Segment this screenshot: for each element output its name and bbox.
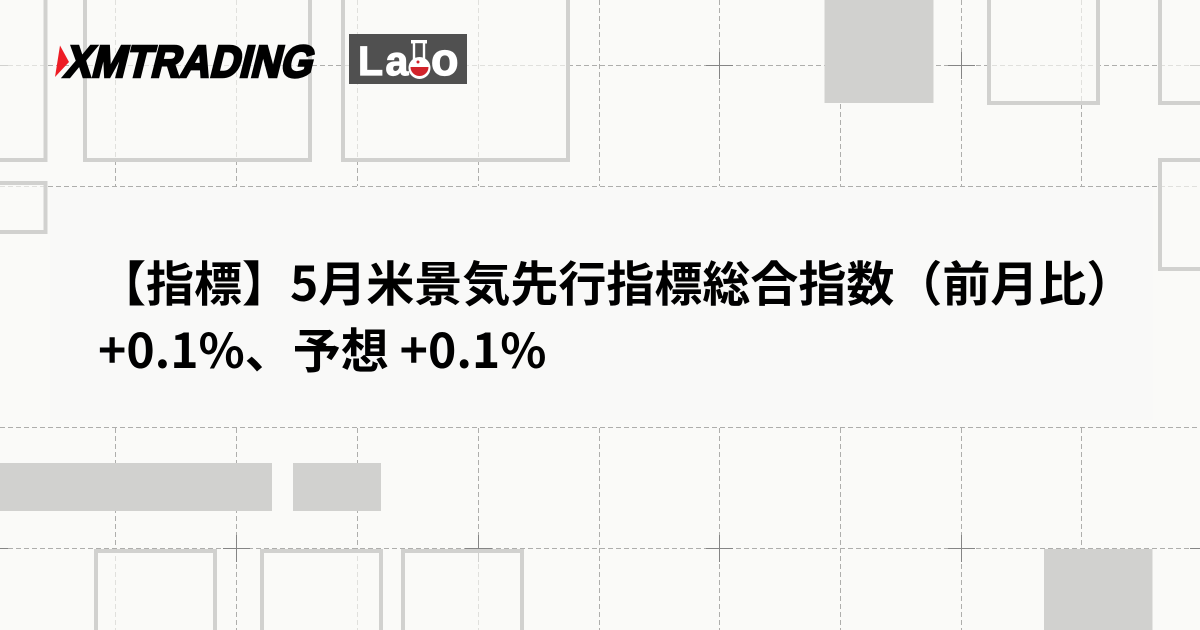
- logo: Lab badge: [349, 34, 467, 85]
- logo: XMTRADING: XMTRADING: [61, 37, 321, 87]
- title: 【指標】5月米景気先行指標総合指数（前月比）: [98, 245, 1134, 315]
- title: +0.1%、予想 +0.1%: [98, 312, 546, 382]
- logo: Lab badge: o: [431, 34, 458, 85]
- central panel: [50, 187, 1153, 420]
- title: [98, 245, 1134, 382]
- logo: Lab badge: La: [358, 38, 411, 84]
- icon: flask: [408, 40, 430, 79]
